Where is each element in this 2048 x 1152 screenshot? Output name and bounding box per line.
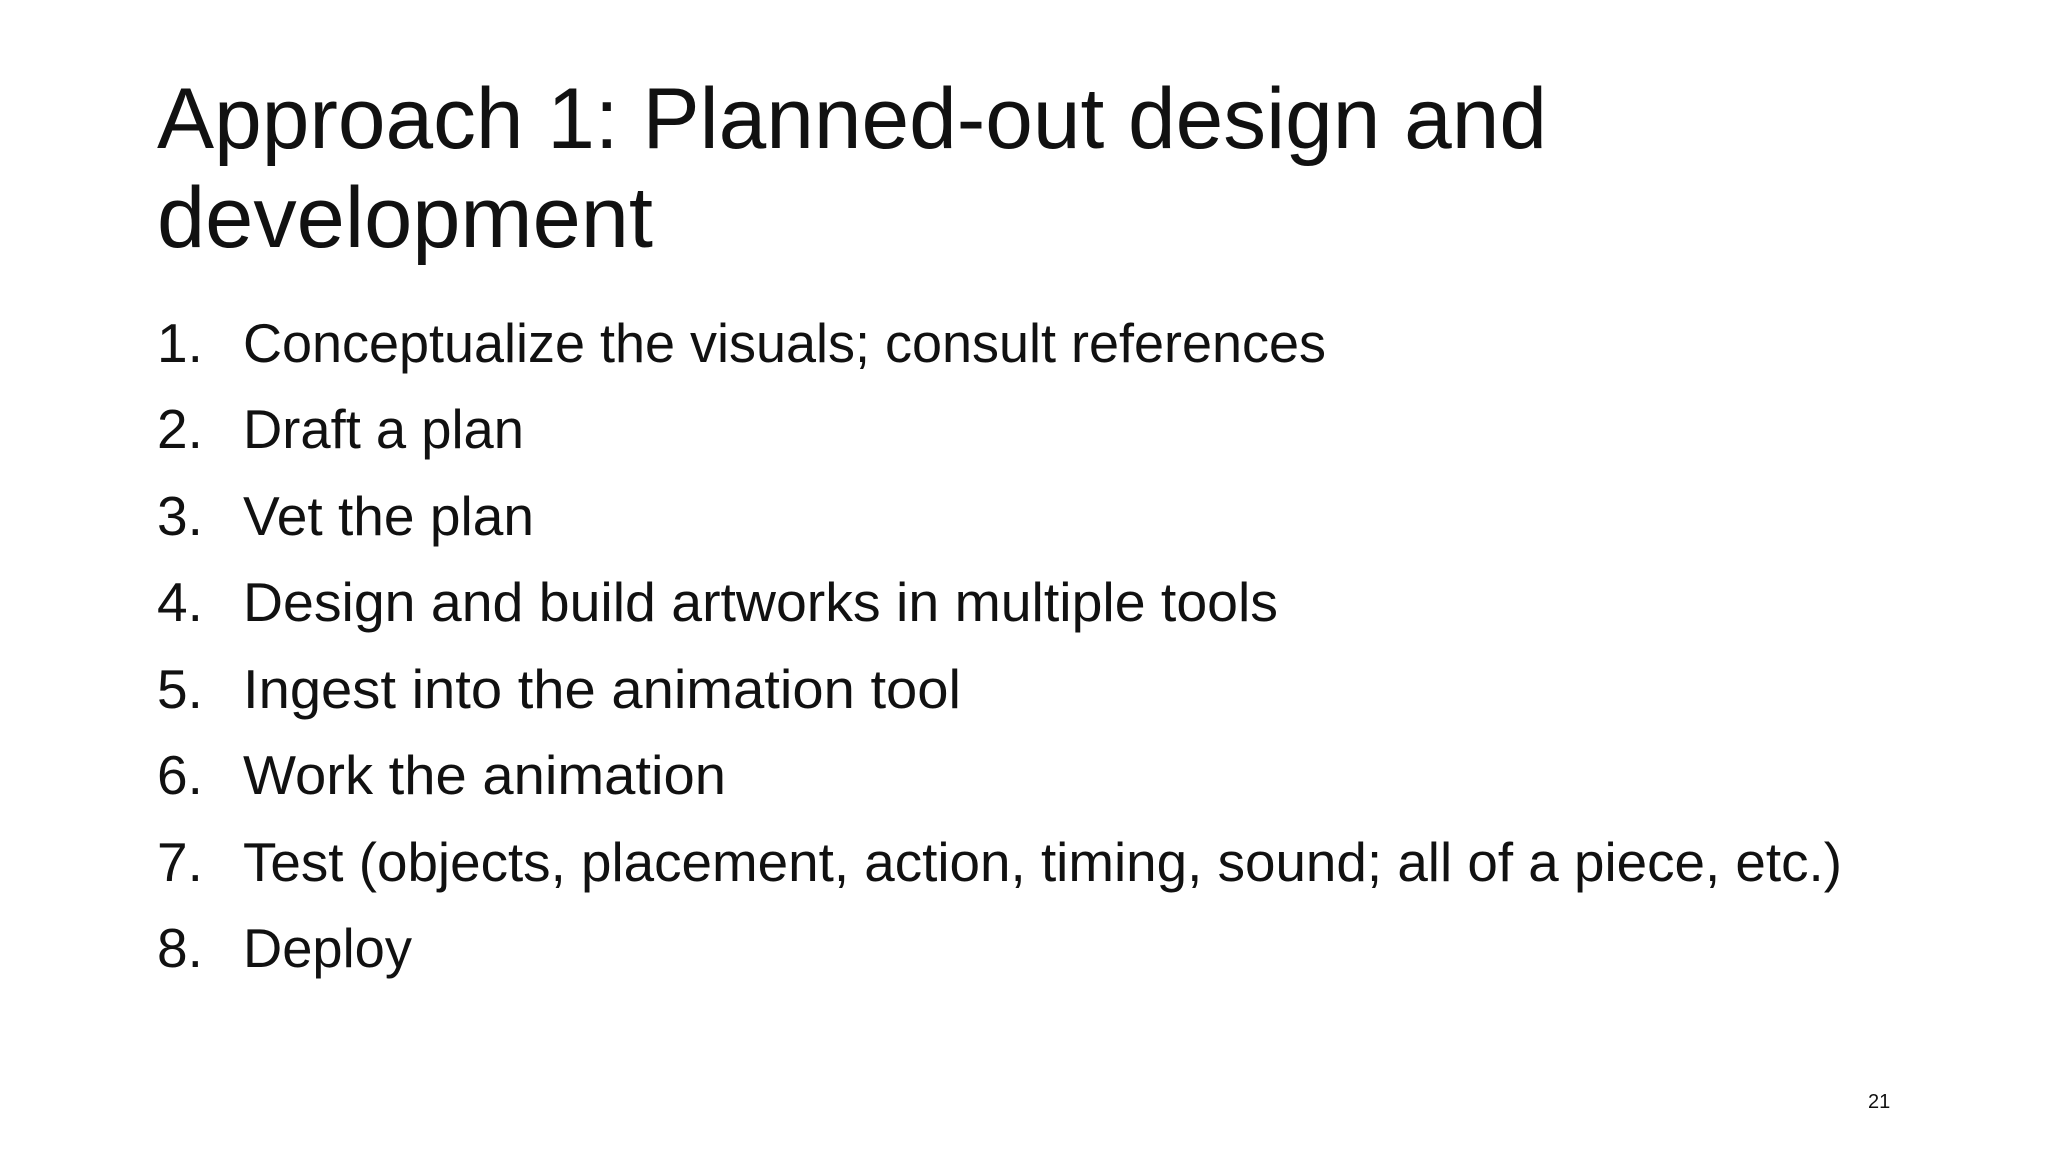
step 7: 7. <box>157 831 203 893</box>
step 4: Design and build artworks in multiple tools <box>243 571 1278 633</box>
step 3: 3. <box>157 485 203 547</box>
step 2: Draft a plan <box>243 398 524 460</box>
title <box>157 71 1547 266</box>
title: Approach 1: Planned-out design and <box>157 71 1547 167</box>
step 7: Test (objects, placement, action, timing, sound; all of a piece, etc.) <box>243 831 1842 893</box>
step 1: 1. <box>157 312 203 374</box>
step 1: Conceptualize the visuals; consult references <box>243 312 1326 374</box>
step 4: 4. <box>157 571 203 633</box>
step 2: 2. <box>157 398 203 460</box>
step 5: 5. <box>157 658 203 720</box>
step 8: 8. <box>157 917 203 979</box>
numbered list of steps <box>157 312 1842 979</box>
step 8 <box>157 917 412 979</box>
step 6: 6. <box>157 744 203 806</box>
step 8: Deploy <box>243 917 412 979</box>
step 6: Work the animation <box>243 744 726 806</box>
page number: 21 <box>1868 1091 1890 1113</box>
title: development <box>157 170 653 266</box>
step 3: Vet the plan <box>243 485 534 547</box>
step 5: Ingest into the animation tool <box>243 658 961 720</box>
